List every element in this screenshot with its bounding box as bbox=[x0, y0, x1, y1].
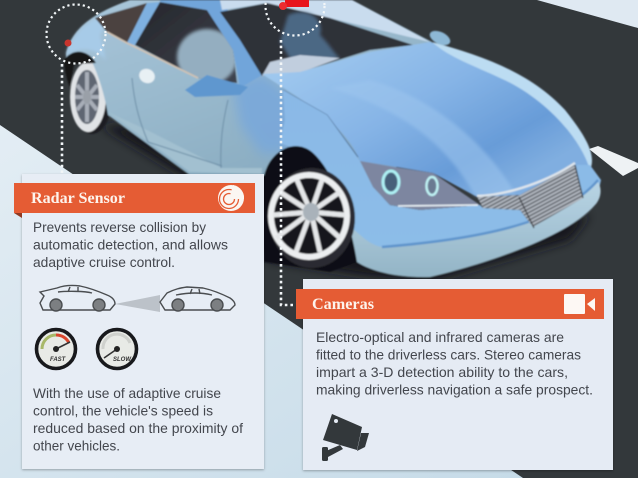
icon: front car bbox=[160, 287, 235, 311]
heading: Radar Sensor bbox=[31, 190, 125, 207]
panel background bbox=[303, 279, 613, 470]
body text bbox=[33, 386, 243, 454]
car shadow bbox=[100, 125, 590, 282]
rear fender highlight bbox=[66, 14, 110, 60]
B pillar bbox=[127, 2, 160, 45]
description text: impart a 3-D detection ability to the cars, bbox=[316, 365, 568, 380]
heading: Cameras bbox=[312, 296, 374, 313]
body text: control, the vehicle's speed is bbox=[33, 404, 213, 418]
wing mirror bbox=[427, 28, 453, 48]
panel: cameras bbox=[296, 279, 613, 470]
headlight bbox=[360, 161, 480, 210]
front sensor marker bbox=[279, 0, 309, 10]
door lines bbox=[132, 78, 228, 168]
front wheel bbox=[268, 168, 355, 268]
icon: fast gauge: FAST bbox=[50, 357, 67, 363]
body text: other vehicles. bbox=[33, 438, 120, 454]
window trim bbox=[107, 32, 198, 78]
rear radar marker bbox=[64, 40, 72, 46]
side window bbox=[135, 2, 237, 83]
quarter window bbox=[95, 3, 147, 43]
rear wheel arch bbox=[64, 52, 96, 88]
intro text: adaptive cruise control. bbox=[33, 255, 175, 270]
side mirror bbox=[185, 75, 248, 97]
description text: fitted to the driverless cars. Stereo cameras bbox=[316, 348, 581, 362]
front blue shading on side bbox=[232, 72, 350, 155]
dotted connector rear bbox=[61, 64, 63, 174]
bumper stripe bbox=[382, 180, 598, 247]
header fold bbox=[14, 213, 22, 218]
car following diagram bbox=[40, 285, 235, 312]
hood crease bbox=[330, 80, 515, 196]
icon: security camera bbox=[322, 414, 369, 461]
hood bbox=[262, 42, 591, 197]
header bar bbox=[14, 183, 255, 213]
A pillar bbox=[160, 0, 264, 88]
icon: video camera bbox=[564, 294, 595, 314]
dashboard bbox=[262, 55, 340, 76]
windshield strip bbox=[220, 0, 430, 42]
hood edge line bbox=[283, 90, 358, 157]
headrest bbox=[177, 29, 237, 85]
icon: slow gauge: SLOW bbox=[113, 357, 132, 363]
intro text: Prevents reverse collision by bbox=[33, 220, 206, 235]
car body side bbox=[66, 0, 432, 262]
panel background bbox=[22, 174, 264, 469]
description text: Electro-optical and infrared cameras are bbox=[316, 330, 564, 345]
bumper lip bbox=[345, 182, 601, 277]
light ground top right bbox=[537, 0, 638, 28]
description text: making driverless navigation a safe prospect. bbox=[316, 382, 593, 398]
seat bbox=[280, 12, 340, 68]
intro text: automatic detection, and allows bbox=[33, 238, 228, 252]
icon: fast gauge bbox=[36, 330, 76, 368]
body text: With the use of adaptive cruise bbox=[33, 386, 221, 401]
white road stripe bbox=[589, 146, 638, 176]
callout dotted circle front bbox=[266, 0, 324, 36]
body text: reduced based on the proximity of bbox=[33, 421, 243, 436]
icon: radar bbox=[218, 185, 244, 211]
right fender highlight bbox=[432, 42, 592, 170]
description text bbox=[316, 330, 593, 398]
header bar bbox=[296, 289, 604, 319]
intro text bbox=[33, 220, 228, 270]
lower sill bbox=[108, 112, 262, 174]
wheel arch front bbox=[264, 146, 357, 272]
car bbox=[64, 0, 601, 282]
distance beam bbox=[115, 295, 160, 312]
callout dotted circle rear bbox=[46, 4, 106, 64]
cabin interior bbox=[220, 3, 413, 76]
rear wheel bbox=[70, 62, 112, 134]
grille bbox=[477, 163, 583, 228]
fender bbox=[280, 90, 601, 262]
icon: slow gauge bbox=[98, 330, 136, 368]
door handle bbox=[137, 66, 157, 86]
light ground lower left bbox=[0, 125, 523, 478]
panel: radar sensor bbox=[14, 174, 264, 469]
icon: rear car bbox=[40, 285, 115, 311]
dotted connector front bbox=[281, 40, 297, 305]
